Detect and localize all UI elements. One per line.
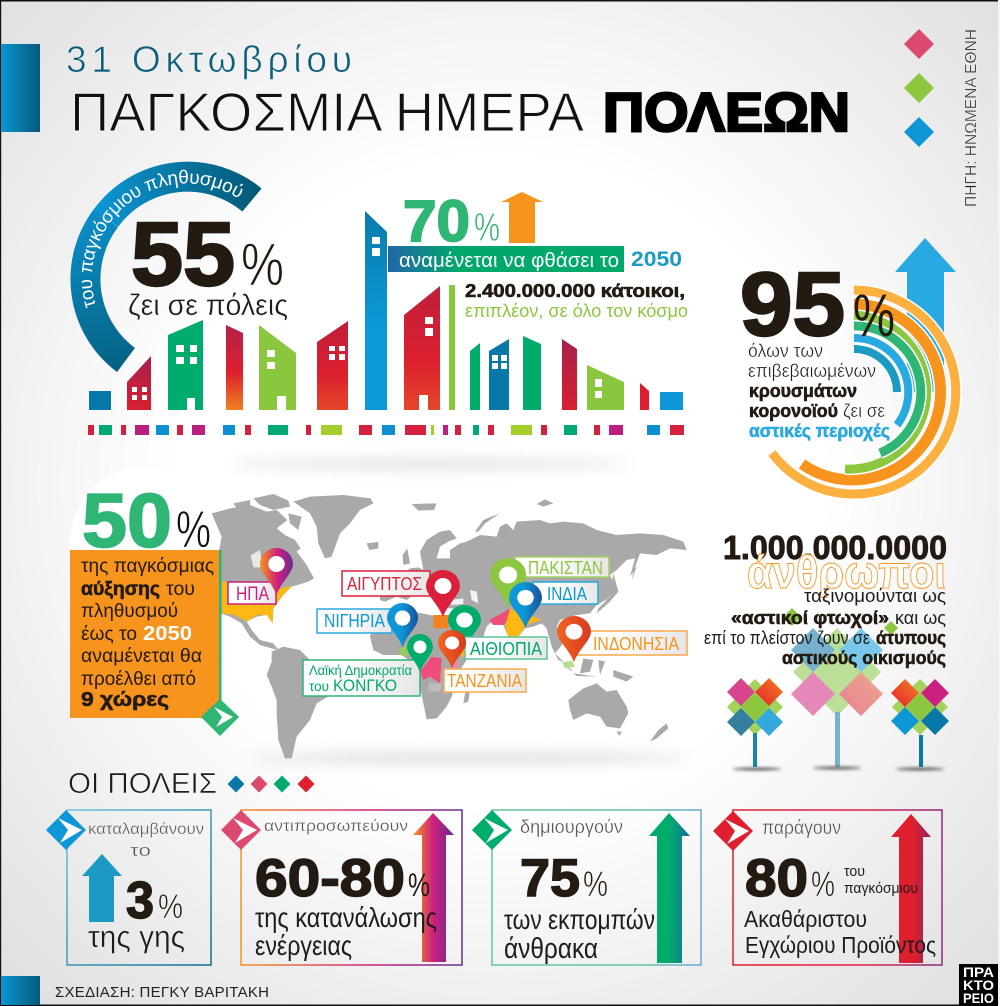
panel: energy consumption xyxy=(221,810,462,965)
logo: ΡΕΙΟ xyxy=(963,990,994,1006)
panel: land share xyxy=(46,810,211,965)
panel: 50% of population growth: 2050 xyxy=(143,623,192,645)
panel: global GDP: Εγχώριου Προϊόντος xyxy=(745,932,936,958)
stat: 70% growth: επιπλέον, σε όλο τον κόσμο xyxy=(465,301,688,321)
footer credit xyxy=(1,976,269,1005)
stat: 70% growth xyxy=(388,189,688,321)
section heading: the cities: ΟΙ ΠΟΛΕΙΣ xyxy=(68,768,217,800)
stat: 55% live in cities: 55 xyxy=(131,205,235,305)
stat: one billion urban poor: και ως xyxy=(895,608,946,628)
map labels lower group: ΑΙΘΙΟΠΙΑ xyxy=(470,639,542,659)
panel: energy consumption: αντιπροσωπεύουν xyxy=(264,818,408,835)
panel: 50% of population growth: 50 xyxy=(82,479,172,564)
stat: 55% live in cities: % xyxy=(241,231,284,298)
arc: share of world population xyxy=(70,162,262,372)
map pins upper group xyxy=(260,548,542,649)
panel: energy consumption: 60-80 xyxy=(255,849,405,908)
stat: one billion urban poor: ταξινομούνται ως xyxy=(804,586,946,606)
panel: energy consumption: της κατανάλωσης xyxy=(255,902,437,933)
panel: 50% of population growth: προέλθει από xyxy=(81,669,196,690)
panel: 50% of population growth: πληθυσμού xyxy=(81,601,178,622)
stat: 95% confirmed cases: % xyxy=(853,282,895,349)
stat: 70% growth: % xyxy=(474,206,500,250)
map labels: ΑΙΓΥΠΤΟΣ xyxy=(347,574,422,594)
stat: one billion urban poor xyxy=(704,529,947,668)
stat: 95% confirmed cases: ζει σε xyxy=(843,401,885,421)
stat: 70% growth: αναμένεται να φθάσει το xyxy=(399,250,619,272)
logo: ΚΤΟ xyxy=(963,977,994,993)
stat: one billion urban poor: αστικούς οικισμούς xyxy=(782,648,946,668)
stat: 95% confirmed cases: αστικές περιοχές xyxy=(749,421,890,441)
stat: 70% growth: 2.400.000.000 κάτοικοι, xyxy=(465,281,685,301)
map labels: ΝΙΓΗΡΙΑ xyxy=(324,611,385,631)
title block: ΠΟΛΕΩΝ xyxy=(603,81,850,143)
logo xyxy=(959,964,998,1006)
panel: 50% of population growth: αναμένεται θα xyxy=(81,646,202,667)
section heading: the cities xyxy=(68,768,314,800)
stat: 95% confirmed cases: 95 xyxy=(740,255,845,355)
panel: carbon emissions: άνθρακα xyxy=(504,933,598,965)
stat: one billion urban poor: άτυπους xyxy=(876,628,946,648)
stat: 70% growth: 2050 xyxy=(631,248,682,271)
map labels lower group: ΚΟΝΓΚΟ xyxy=(333,676,397,695)
panel: global GDP: παράγουν xyxy=(762,818,841,839)
panel: land share: της γης xyxy=(88,919,185,954)
icon: diamond trees xyxy=(727,608,949,770)
panel: carbon emissions: των εκπομπών xyxy=(504,904,655,935)
stat: one billion urban poor: άνθρωποι xyxy=(747,546,946,598)
map labels lower group: Λαϊκή Δημοκρατία xyxy=(309,662,412,678)
panel: global GDP: παγκόσμιου xyxy=(844,880,918,897)
panel: 50% of population growth xyxy=(69,468,239,736)
panel: global GDP: Ακαθάριστου xyxy=(744,906,867,932)
panel: global GDP xyxy=(713,810,942,965)
chart: concentric rings with arrow xyxy=(772,238,956,494)
dashed colour strip xyxy=(88,425,684,435)
panel: global GDP: του xyxy=(844,863,865,880)
title block xyxy=(1,39,850,143)
panel: carbon emissions xyxy=(472,810,701,965)
world map xyxy=(212,494,687,758)
stat: one billion urban poor: «αστικοί φτωχοί» xyxy=(731,608,889,628)
map labels lower group: ΤΑΝΖΑΝΙΑ xyxy=(447,671,522,691)
panel: land share: 3 xyxy=(126,872,154,930)
map labels: ΠΑΚΙΣΤΑΝ xyxy=(528,558,603,578)
panel: 50% of population growth: % xyxy=(176,501,211,559)
stat: 95% confirmed cases xyxy=(740,255,895,441)
stat: 95% confirmed cases: όλων των xyxy=(748,341,823,361)
stat: 70% growth: 70 xyxy=(403,189,470,254)
panel: 50% of population growth: 9 χώρες xyxy=(81,689,169,711)
map labels: ΗΠΑ xyxy=(236,584,269,605)
map pins lower group xyxy=(407,616,591,672)
map labels lower group: ΙΝΔΟΝΗΣΙΑ xyxy=(593,634,679,654)
panel: 50% of population growth: έως το xyxy=(81,624,137,645)
stat: 95% confirmed cases: κορονοϊού xyxy=(749,401,838,421)
panel: land share: καταλαμβάνουν xyxy=(88,821,204,838)
logo: ΠΡΑ xyxy=(963,964,994,980)
stat: 95% confirmed cases: κρουσμάτων xyxy=(749,381,857,401)
highlighted countries xyxy=(222,582,575,692)
map labels xyxy=(228,557,609,633)
stat: 55% live in cities xyxy=(128,205,288,322)
soft shadows above and below map xyxy=(230,460,690,763)
panel: land share: το xyxy=(130,841,151,860)
decorative diamonds top right xyxy=(904,29,934,147)
source note: ΠΗΓΗ: ΗΝΩΜΕΝΑ ΕΘΝΗ xyxy=(963,29,980,207)
panel: 50% of population growth: του xyxy=(166,579,195,600)
title block: ΠΑΓΚΟΣΜΙΑ ΗΜΕΡΑ xyxy=(70,81,584,143)
panel: energy consumption: % xyxy=(408,867,430,903)
skyline of buildings xyxy=(89,211,683,410)
panel: land share: % xyxy=(158,888,183,926)
stat: one billion urban poor: επί το πλείστον ζουν σε xyxy=(704,628,870,648)
map labels: ΙΝΔΙΑ xyxy=(547,584,587,604)
panel: global GDP: 80 xyxy=(745,849,808,908)
map labels lower group xyxy=(303,631,687,696)
panel: energy consumption: ενέργειας xyxy=(255,930,352,961)
panel: carbon emissions: % xyxy=(583,865,608,904)
panel: carbon emissions: δημιουργούν xyxy=(520,817,623,837)
panel: 50% of population growth: αύξησης xyxy=(81,579,160,600)
arc: share of world population: του παγκόσμιου πληθυσμού xyxy=(82,170,244,308)
panel: global GDP: % xyxy=(811,865,835,904)
stat: one billion urban poor: 1.000.000.0000 xyxy=(723,529,947,566)
footer credit: ΣΧΕΔΙΑΣΗ: ΠΕΓΚΥ ΒΑΡΙΤΑΚΗ xyxy=(55,984,269,1001)
panel: carbon emissions: 75 xyxy=(520,849,580,908)
stat: 95% confirmed cases: επιβεβαιωμένων xyxy=(748,361,876,381)
title block: 31 Οκτωβρίου xyxy=(66,39,352,80)
map labels lower group: του xyxy=(309,678,329,694)
panel: 50% of population growth: της παγκόσμιας xyxy=(81,556,214,577)
stat: 55% live in cities: ζει σε πόλεις xyxy=(128,289,288,322)
